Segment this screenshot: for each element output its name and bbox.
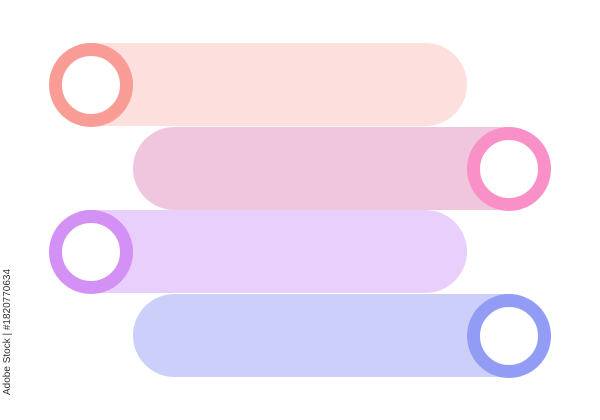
icon: ring 1 [49, 43, 133, 127]
panel: bar 3 [50, 210, 467, 293]
icon: ring 4 [467, 294, 551, 378]
panel: bar 1 [50, 43, 467, 126]
panel: bar 2 [133, 127, 550, 210]
watermark text: Adobe Stock | #1820770634 [2, 269, 13, 395]
icon: ring 2 [467, 127, 551, 211]
panel: bar 4 [133, 294, 550, 377]
icon: ring 3 [49, 210, 133, 294]
